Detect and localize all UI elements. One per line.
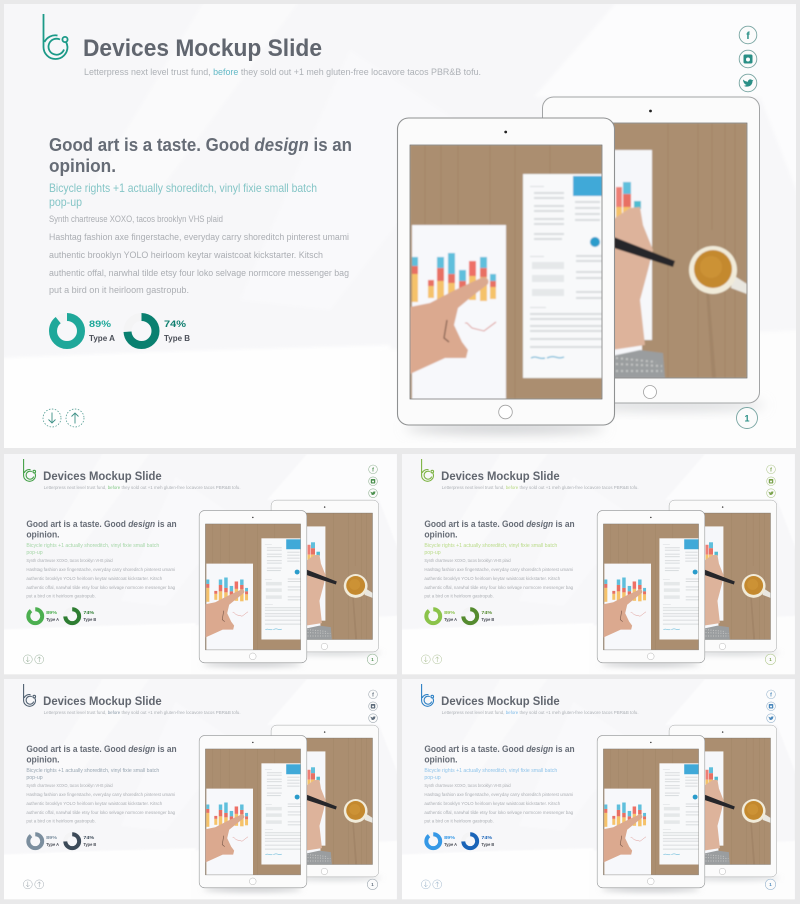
body text: Synth chartreuse XOXO, tacos brooklyn VHS plaid [26, 783, 113, 788]
body text: put a bird on it heirloom gastropub. [26, 818, 96, 823]
page number [736, 408, 758, 428]
body text: put a bird on it heirloom gastropub. [424, 593, 494, 598]
donut chart: Type A 89%: Type A [444, 617, 457, 622]
body text [424, 783, 574, 823]
icon: logo [44, 14, 68, 59]
donut chart: Type A 89%: 89% [46, 610, 58, 616]
icon: twitter [767, 489, 775, 498]
tablets mockup [398, 97, 765, 433]
body text: authentic brooklyn YOLO heirloom keytar waistcoat kickstarter. Kitsch [26, 576, 163, 581]
icon: facebook: f [372, 692, 374, 698]
slide 2: green [2, 452, 399, 676]
icon: down arrow [23, 655, 32, 664]
icon: up arrow [66, 409, 84, 427]
icon: instagram [767, 477, 775, 486]
donut chart: Type A 89% [426, 609, 457, 623]
icon: facebook: f [770, 692, 772, 698]
body text: put a bird on it heirloom gastropub. [424, 818, 494, 823]
body text [424, 558, 574, 598]
donut chart: Type B 74% [463, 834, 494, 848]
heading: Good art is a taste. Good design is an [26, 744, 177, 754]
donut chart: Type A 89%: 89% [89, 319, 112, 330]
slide 5: blue: opinion. [424, 754, 458, 764]
page number: 1 [769, 882, 772, 887]
icon: facebook: f [770, 467, 772, 473]
icon: up arrow [35, 655, 44, 664]
slide 4: slate grey [2, 677, 399, 901]
body text: Hashtag fashion axe fingerstache, everyday carry shoreditch pinterest umami [26, 567, 175, 572]
icon: up arrow [433, 655, 442, 664]
donut chart: Type B 74%: 74% [481, 610, 493, 616]
title: Devices Mockup Slide [441, 469, 560, 483]
page number: 1 [371, 882, 374, 887]
slide 1: teal main slide: opinion. [49, 155, 116, 176]
slide 3: light green: pop-up [424, 550, 441, 556]
slide 4: slate grey: opinion. [26, 754, 60, 764]
heading: Good art is a taste. Good design is an [424, 744, 575, 754]
subtitle: Letterpress next level trust fund, before they sold out +1 meh gluten-free locavore tacos PBR&B tofu. [44, 710, 241, 715]
donut chart: Type A 89% [53, 317, 115, 345]
slide 2: green: pop-up [26, 550, 43, 556]
icon: instagram [767, 702, 775, 711]
icon: instagram [369, 702, 377, 711]
donut chart: Type A 89%: 89% [444, 835, 456, 841]
body text: authentic brooklyn YOLO heirloom keytar waistcoat kickstarter. Kitsch [424, 801, 561, 806]
page number [367, 654, 378, 665]
icon: down arrow [421, 880, 430, 889]
page number: 1 [371, 657, 374, 662]
body text: put a bird on it heirloom gastropub. [49, 285, 189, 295]
icon: facebook [369, 690, 377, 699]
donut chart: Type B 74%: 74% [481, 835, 493, 841]
body text: authentic offal, narwhal tilde etsy four loko selvage normcore messenger bag [26, 810, 176, 815]
body text: authentic brooklyn YOLO heirloom keytar waistcoat kickstarter. Kitsch [424, 576, 561, 581]
body text: Hashtag fashion axe fingerstache, everyday carry shoreditch pinterest umami [49, 232, 349, 242]
icon: facebook: f [372, 467, 374, 473]
subtitle: Letterpress next level trust fund, before they sold out +1 meh gluten-free locavore tacos PBR&B tofu. [442, 710, 639, 715]
icon: facebook [739, 26, 757, 44]
donut chart: Type B 74% [128, 317, 190, 345]
donut chart: Type A 89%: Type A [444, 842, 457, 847]
body text: authentic offal, narwhal tilde etsy four loko selvage normcore messenger bag [26, 585, 176, 590]
donut chart: Type B 74%: 74% [83, 835, 95, 841]
body text [49, 214, 349, 295]
page number [765, 879, 776, 890]
page number: 1 [744, 414, 750, 424]
subtitle: Letterpress next level trust fund, before they sold out +1 meh gluten-free locavore tacos PBR&B tofu. [84, 67, 481, 78]
body text: authentic offal, narwhal tilde etsy four loko selvage normcore messenger bag [49, 268, 349, 278]
icon: down arrow [23, 880, 32, 889]
icon: facebook: f [746, 30, 750, 42]
donut chart: Type B 74% [463, 609, 494, 623]
tablets mockup [597, 725, 779, 892]
body text: authentic brooklyn YOLO heirloom keytar waistcoat kickstarter. Kitsch [49, 250, 323, 260]
icon: logo [24, 459, 36, 481]
donut chart: Type B 74%: 74% [83, 610, 95, 616]
body text: Hashtag fashion axe fingerstache, everyday carry shoreditch pinterest umami [424, 792, 573, 797]
icon: twitter [767, 714, 775, 723]
title: Devices Mockup Slide [43, 469, 162, 483]
body text: authentic brooklyn YOLO heirloom keytar waistcoat kickstarter. Kitsch [26, 801, 163, 806]
heading: Good art is a taste. Good design is an [49, 134, 352, 155]
slide 1: teal main slide: pop-up [49, 196, 82, 209]
icon: logo [422, 459, 434, 481]
tablets mockup [597, 500, 779, 667]
body text: Synth chartreuse XOXO, tacos brooklyn VHS plaid [424, 558, 511, 563]
slide 3: light green: opinion. [424, 529, 458, 539]
slide 4: slate grey: pop-up [26, 775, 43, 781]
donut chart: Type B 74%: Type B [481, 617, 494, 622]
title: Devices Mockup Slide [43, 694, 162, 708]
icon: twitter [739, 74, 757, 92]
body text: put a bird on it heirloom gastropub. [26, 593, 96, 598]
slide 5: blue [400, 677, 797, 901]
donut chart: Type A 89%: 89% [444, 610, 456, 616]
body text: Synth chartreuse XOXO, tacos brooklyn VHS plaid [49, 214, 223, 224]
subtitle: Letterpress next level trust fund, before they sold out +1 meh gluten-free locavore tacos PBR&B tofu. [442, 485, 639, 490]
donut chart: Type B 74%: Type B [164, 333, 190, 343]
icon: facebook [767, 690, 775, 699]
accent subheading: Bicycle rights +1 actually shoreditch, vinyl fixie small batch [26, 768, 159, 774]
donut chart: Type B 74% [65, 609, 96, 623]
icon: facebook [369, 465, 377, 474]
donut chart: Type A 89%: Type A [46, 842, 59, 847]
body text: Synth chartreuse XOXO, tacos brooklyn VHS plaid [26, 558, 113, 563]
icon: twitter [369, 714, 377, 723]
donut chart: Type B 74% [65, 834, 96, 848]
icon: instagram [369, 477, 377, 486]
body text [26, 783, 176, 823]
donut chart: Type A 89% [28, 834, 59, 848]
donut chart: Type A 89% [426, 834, 457, 848]
page number [765, 654, 776, 665]
body text: Hashtag fashion axe fingerstache, everyday carry shoreditch pinterest umami [424, 567, 573, 572]
slide 1: teal main slide [0, 0, 800, 452]
body text: authentic offal, narwhal tilde etsy four loko selvage normcore messenger bag [424, 810, 574, 815]
heading: Good art is a taste. Good design is an [26, 519, 177, 529]
body text: authentic offal, narwhal tilde etsy four loko selvage normcore messenger bag [424, 585, 574, 590]
icon: up arrow [433, 880, 442, 889]
icon: twitter [369, 489, 377, 498]
icon: down arrow [421, 655, 430, 664]
donut chart: Type A 89%: Type A [46, 617, 59, 622]
tablets mockup [199, 500, 381, 667]
page number: 1 [769, 657, 772, 662]
title: Devices Mockup Slide [441, 694, 560, 708]
body text: Hashtag fashion axe fingerstache, everyday carry shoreditch pinterest umami [26, 792, 175, 797]
slide 3: light green [400, 452, 797, 676]
accent subheading: Bicycle rights +1 actually shoreditch, vinyl fixie small batch [26, 543, 159, 549]
subtitle: Letterpress next level trust fund, before they sold out +1 meh gluten-free locavore tacos PBR&B tofu. [44, 485, 241, 490]
donut chart: Type A 89%: Type A [89, 333, 115, 343]
donut chart: Type A 89%: 89% [46, 835, 58, 841]
icon: instagram [739, 50, 757, 68]
tablets mockup [199, 725, 381, 892]
icon: logo [24, 684, 36, 706]
icon: down arrow [43, 409, 61, 427]
slide 2: green: opinion. [26, 529, 60, 539]
title: Devices Mockup Slide [83, 35, 322, 62]
page number [367, 879, 378, 890]
slide 5: blue: pop-up [424, 775, 441, 781]
accent subheading: Bicycle rights +1 actually shoreditch, vinyl fixie small batch [424, 768, 557, 774]
icon: up arrow [35, 880, 44, 889]
donut chart: Type B 74%: Type B [83, 842, 96, 847]
accent subheading: Bicycle rights +1 actually shoreditch, vinyl fixie small batch [424, 543, 557, 549]
donut chart: Type B 74%: 74% [164, 319, 187, 330]
icon: facebook [767, 465, 775, 474]
heading: Good art is a taste. Good design is an [424, 519, 575, 529]
body text: Synth chartreuse XOXO, tacos brooklyn VHS plaid [424, 783, 511, 788]
icon: logo [422, 684, 434, 706]
accent subheading: Bicycle rights +1 actually shoreditch, vinyl fixie small batch [49, 182, 317, 195]
body text [26, 558, 176, 598]
donut chart: Type B 74%: Type B [481, 842, 494, 847]
donut chart: Type B 74%: Type B [83, 617, 96, 622]
donut chart: Type A 89% [28, 609, 59, 623]
